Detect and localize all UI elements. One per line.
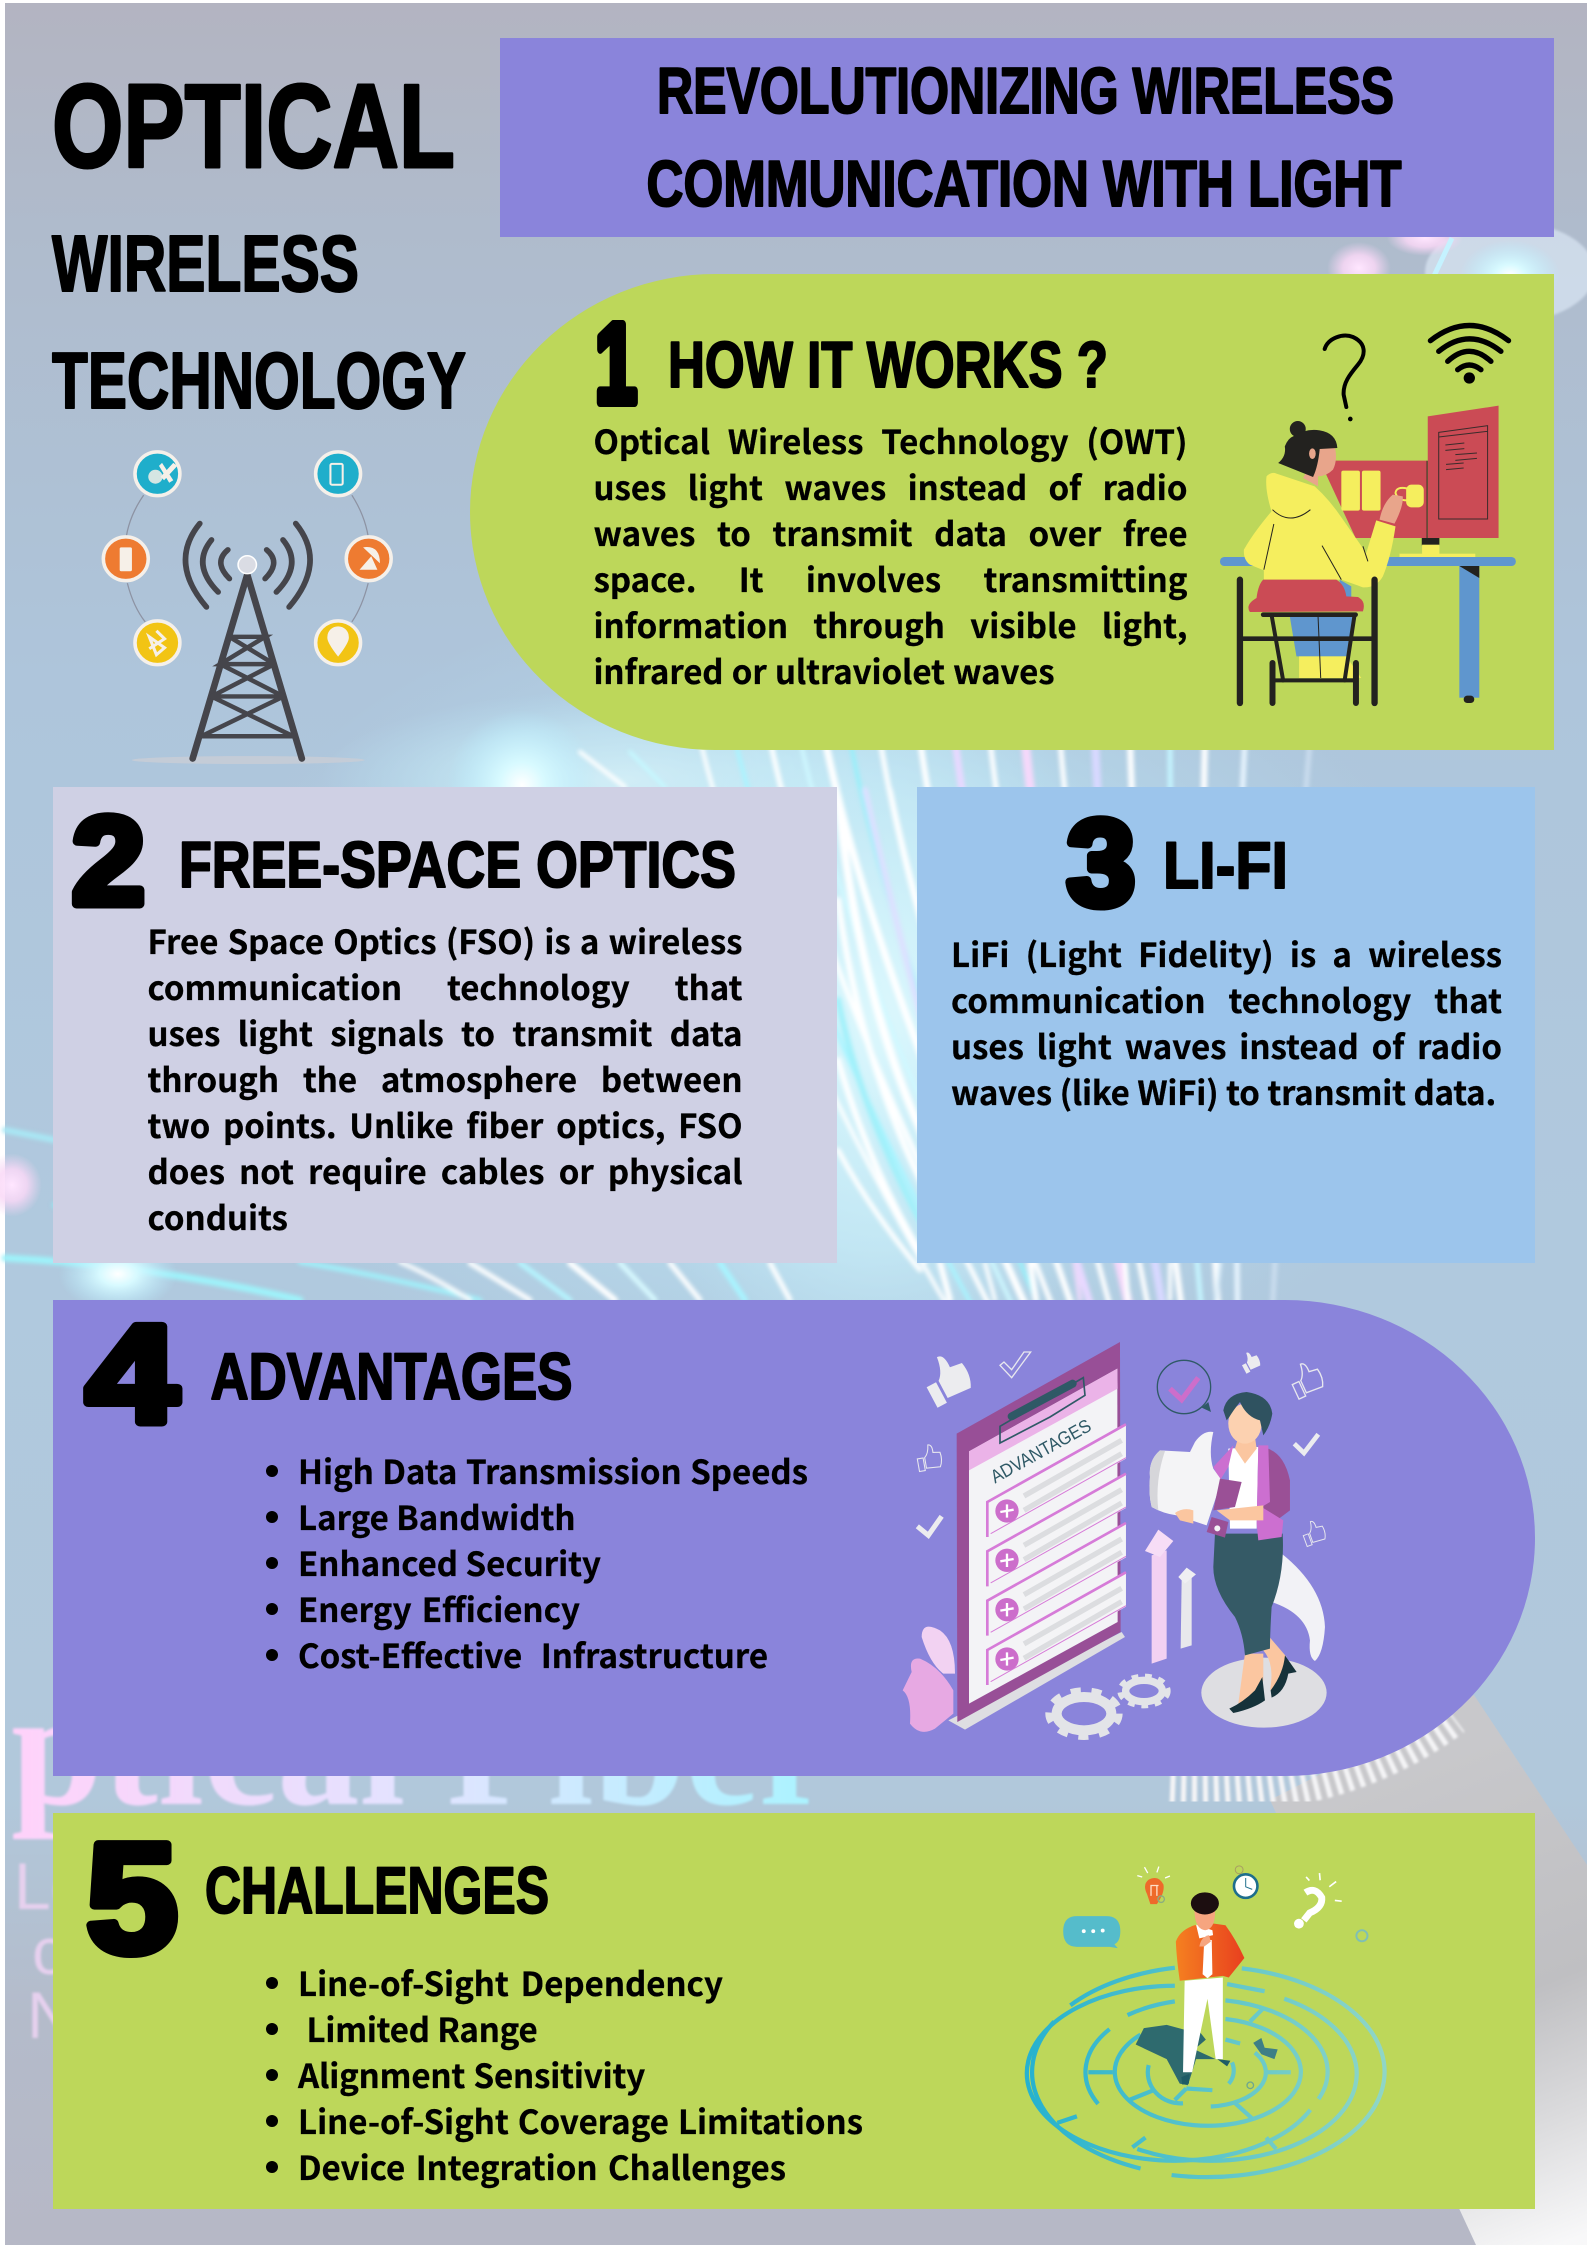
heading: advantages: ADVANTAGES [210,1339,572,1413]
list: challenges [266,1958,863,2190]
text: how it works description [594,416,1188,694]
text: free-space optics description: Free Space Optics (FSO) is a wireless [148,916,742,964]
icon: tower badges [104,452,391,664]
illustration: woman with advantages clipboard [902,1342,1327,1740]
text: li-fi description: communication technology that [951,974,1502,1022]
heading: free-space optics: FREE-SPACE OPTICS [179,828,736,901]
man [1176,1892,1244,2085]
clipboard: ADVANTAGES [987,1414,1095,1487]
heading: li-fi: LI-FI [1163,828,1288,902]
illustration: man thinking in a maze [1024,1865,1387,2180]
text: free-space optics description: through the atmosphere between [148,1054,742,1102]
illustration: person at desk with wifi [1220,322,1516,706]
heading: how it works: HOW IT WORKS ? [668,328,1108,401]
list: advantages: Cost-Effective Infrastructure [298,1630,768,1678]
shadow [1136,2025,1216,2085]
text: free-space optics description: does not require cables or physical [148,1146,742,1194]
thumbs, checks and gears [903,1347,1327,1736]
list: advantages [266,1446,808,1678]
text: how it works description: space. It involves transmitting [594,554,1188,602]
text: free-space optics description: uses light signals to transmit data [148,1008,742,1056]
maze [1027,1968,1385,2177]
text: free-space optics description [148,916,742,1240]
panel: li-fi [917,787,1535,1263]
header banner: Revolutionizing wireless communication with light: REVOLUTIONIZING WIRELESS [657,54,1394,127]
text: how it works description: waves to transmit data over free [594,508,1188,556]
icon: stopwatch [1234,1866,1257,1898]
text: how it works description: uses light waves instead of radio [594,462,1188,510]
icon: light bulb [1137,1867,1170,1904]
woman with thumbs up [1149,1392,1327,1727]
background: fibre optic light: Lo [14,1849,87,1923]
icon: radio tower with connected device badges [102,450,393,764]
list: challenges: Alignment Sensitivity [298,2050,645,2098]
text: free-space optics description: two points. Unlike fiber optics, FSO [148,1100,742,1148]
panel: free-space optics [53,787,837,1263]
speech bubble [1063,1916,1120,1948]
text: li-fi description: waves (like WiFi) to transmit data. [951,1066,1496,1114]
text: free-space optics description: communication technology that [148,962,742,1010]
list: challenges: Device Integration Challenges [298,2142,786,2190]
number 4: 4 [86,1297,178,1452]
text: how it works description: infrared or ultraviolet waves [594,646,1054,694]
main title: Optical Wireless Technology: WIRELESS [52,219,359,308]
text: li-fi description [951,928,1502,1114]
speech bubble with check [1157,1360,1211,1413]
number 2: 2 [72,792,145,931]
panel: advantages [53,1300,1535,1776]
clipboard [948,1342,1126,1729]
main title: Optical Wireless Technology: OPTICAL [52,60,455,193]
list: advantages: High Data Transmission Speeds [298,1446,808,1494]
panel: challenges [53,1813,1535,2208]
list: challenges: Limited Range [306,2004,538,2052]
list: advantages: Enhanced Security [298,1538,601,1586]
icon: question mark [1294,1873,1342,1929]
number 3: 3 [1067,794,1135,930]
number 5: 5 [86,1812,178,1986]
list: challenges: Line-of-Sight Coverage Limitations [298,2096,863,2144]
text: free-space optics description: conduits [148,1192,288,1240]
main title: Optical Wireless Technology: TECHNOLOGY [52,336,466,425]
header banner: Revolutionizing wireless communication with light [500,38,1554,237]
heading: challenges: CHALLENGES [205,1853,549,1927]
background: fibre optic light: c [32,1914,65,1988]
background: fibre optic light: ptical Fiber [11,1657,832,1840]
background: fibre optic light: N [27,1978,75,2052]
list: advantages: Large Bandwidth [298,1492,575,1540]
text: li-fi description: uses light waves instead of radio [951,1020,1502,1068]
text: how it works description: information through visible light, [594,600,1188,648]
text: how it works description: Optical Wireless Technology (OWT) [594,416,1188,464]
text: li-fi description: LiFi (Light Fidelity) is a wireless [951,928,1502,976]
cable end [1170,1695,1587,2245]
main title: Optical Wireless Technology [51,60,466,425]
header banner: Revolutionizing wireless communication with light: COMMUNICATION WITH LIGHT [646,147,1402,220]
panel: how it works [470,274,1554,750]
number 1: 1 [595,300,637,426]
list: advantages: Energy Efficiency [298,1584,580,1632]
list: challenges: Line-of-Sight Dependency [298,1958,723,2006]
